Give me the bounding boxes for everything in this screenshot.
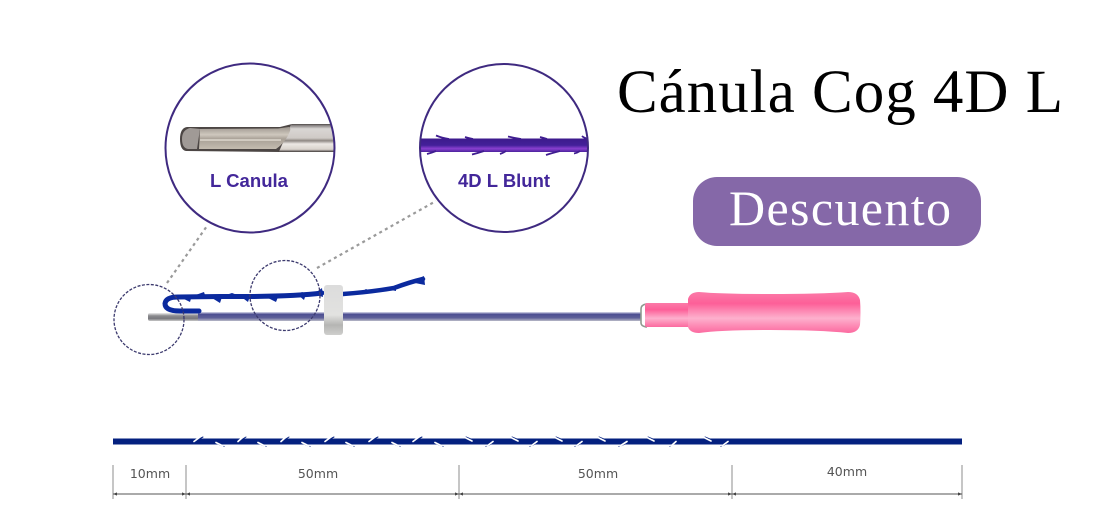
detail circle: L Canula: [166, 64, 340, 232]
label: 4D L Blunt: 4D L Blunt: [458, 171, 550, 191]
discount badge: Descuento: [729, 180, 951, 236]
barbed thread close-up: [418, 136, 590, 155]
canula tip: [180, 124, 340, 152]
leader line: L Canula: [167, 226, 207, 283]
blue barb tips: [197, 437, 726, 446]
dashed magnifier circle: thread: [250, 260, 320, 330]
label: 50mm: 50mm: [298, 466, 338, 481]
white barb cuts: [194, 437, 728, 446]
leader line: 4D L Blunt: [317, 201, 436, 268]
cannula shaft: [148, 313, 200, 321]
label: 10mm: 10mm: [130, 466, 170, 481]
dashed magnifier circle: cannula tip: [114, 284, 184, 354]
pink hub: [645, 303, 690, 327]
label: L Canula: L Canula: [210, 171, 289, 191]
detail circle: 4D L Blunt: [418, 64, 590, 232]
discount badge: [693, 177, 981, 246]
silicone ring: [324, 285, 343, 335]
full-length barbed thread: [113, 437, 962, 446]
pink handle: [688, 292, 860, 333]
label: 40mm: 40mm: [827, 464, 867, 479]
metal ferrule: [641, 304, 646, 327]
thread barbs: [178, 276, 425, 303]
dimension scale: [113, 464, 962, 499]
barbed thread, front section: [165, 279, 423, 311]
label: 50mm: 50mm: [578, 466, 618, 481]
cannula assembly: [114, 260, 860, 354]
title: Cánula Cog 4D L: [617, 59, 1063, 126]
